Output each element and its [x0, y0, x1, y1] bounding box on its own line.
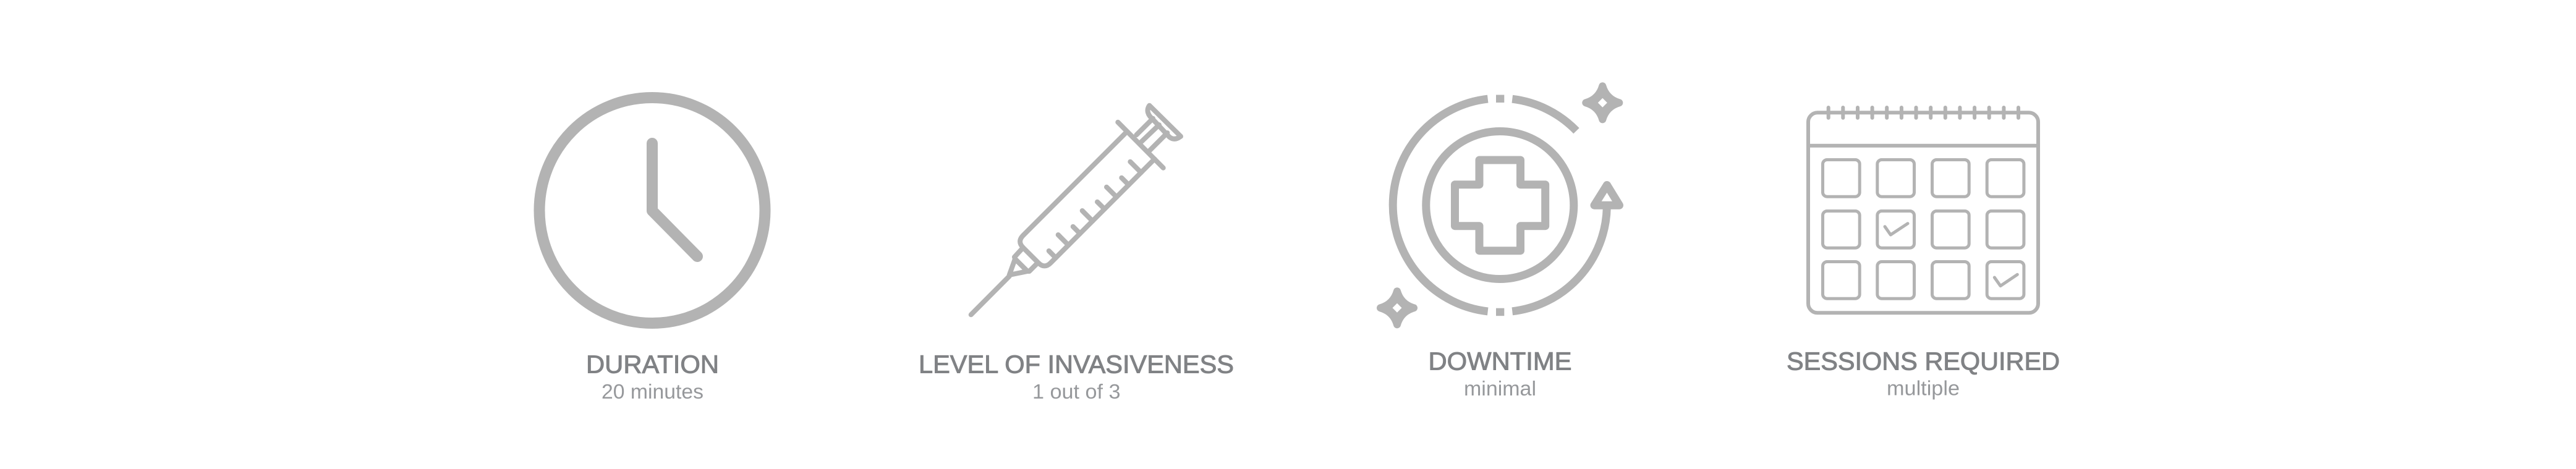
value: minimal: minimal [1464, 377, 1536, 400]
icon: calendar [1808, 108, 2038, 313]
heading: level of invasiveness: LEVEL OF INVASIVENESS [919, 350, 1234, 378]
panel: downtime [1380, 86, 1620, 400]
heading: downtime: DOWNTIME [1428, 347, 1571, 376]
heading: duration: DURATION [586, 350, 719, 378]
panel: sessions required [1787, 108, 2060, 399]
value: 20 minutes: 20 minutes [601, 380, 704, 403]
value: multiple: multiple [1887, 377, 1960, 399]
panel: level of invasiveness [919, 106, 1234, 403]
icon: clock [539, 98, 765, 323]
value: 1 out of 3: 1 out of 3 [1032, 380, 1120, 403]
panel: duration [539, 98, 765, 403]
icon: syringe [971, 106, 1181, 315]
heading: sessions required: SESSIONS REQUIRED [1787, 347, 2060, 376]
icon: medical cross in circular arrow [1380, 86, 1620, 324]
